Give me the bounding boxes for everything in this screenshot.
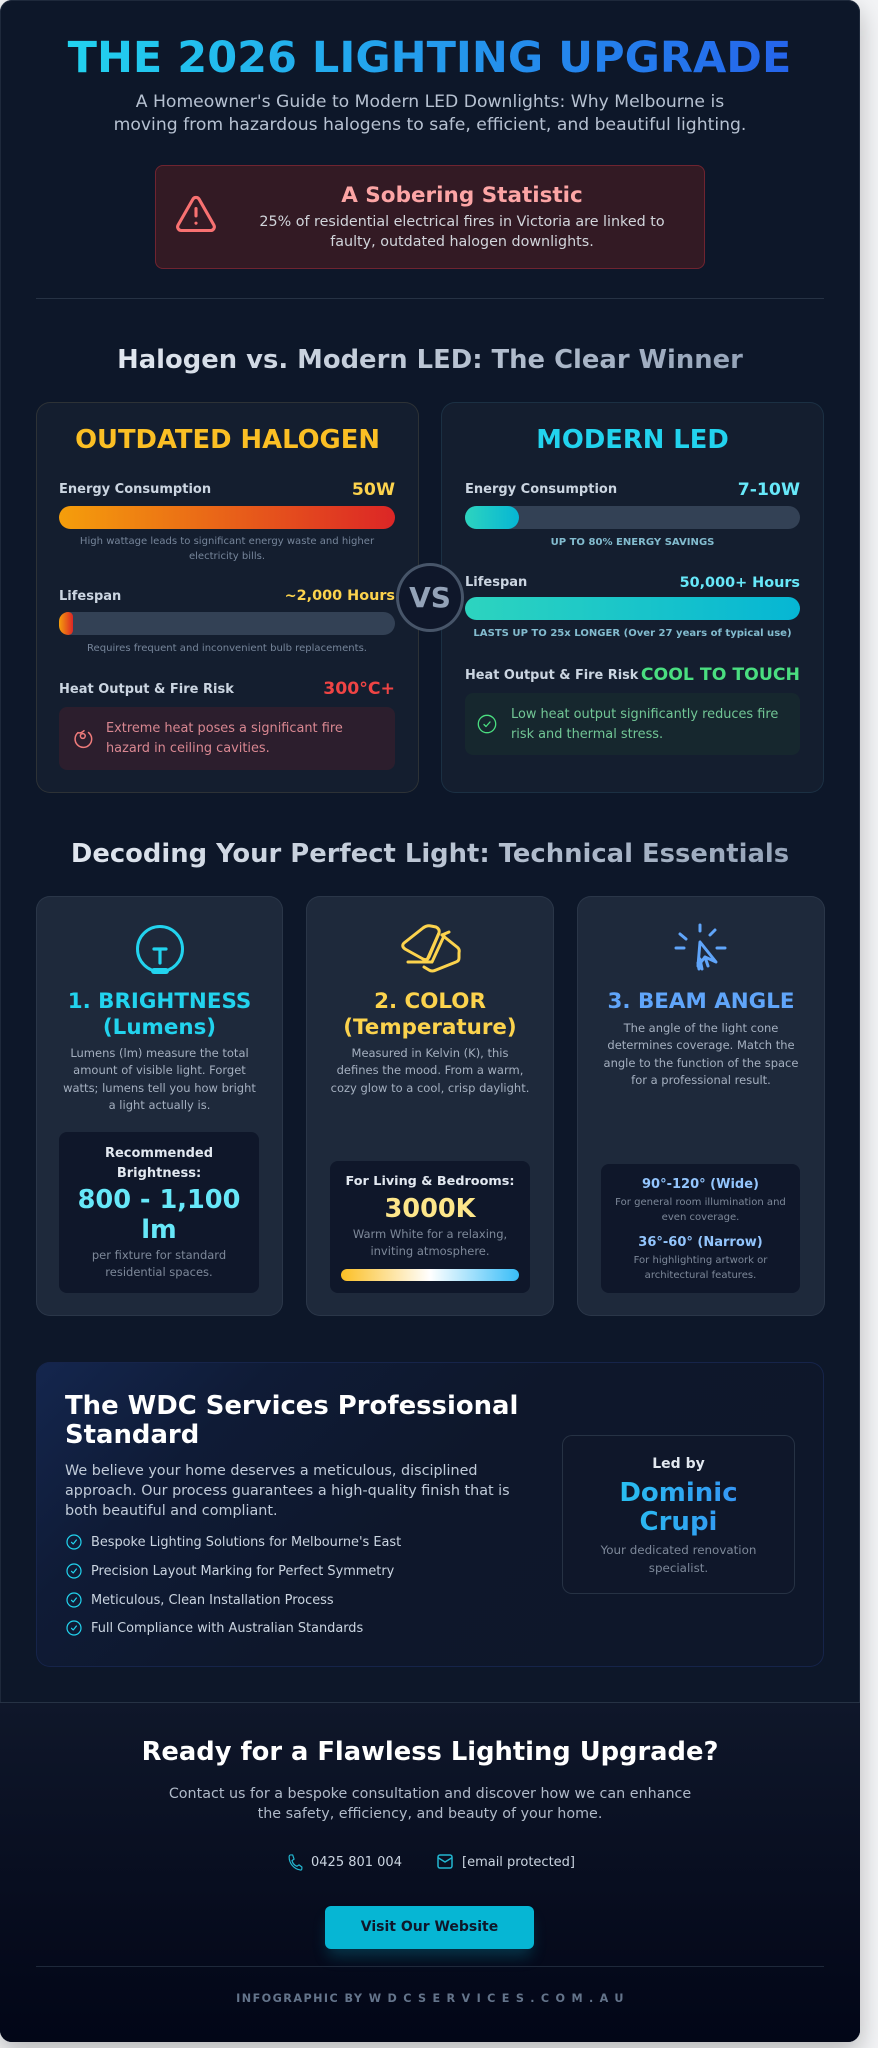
recommendation value — [78, 1185, 240, 1245]
energy label: Energy Consumption — [465, 482, 617, 497]
color title — [343, 989, 517, 1040]
panel: LED — [441, 402, 824, 793]
footer text: Contact us for a bespoke consultation and discover how we can enhance — [169, 1786, 691, 1802]
lifespan note: Requires frequent and inconvenient bulb replacements. — [87, 643, 367, 654]
color text — [331, 1046, 529, 1095]
beam text — [604, 1021, 798, 1087]
icon: color swatches — [401, 924, 461, 972]
checklist item — [66, 1534, 401, 1550]
heat value: COOL TO TOUCH — [641, 665, 800, 685]
heat label: Heat Output & Fire Risk — [59, 682, 234, 697]
divider — [36, 1966, 824, 1967]
brightness title: 1. BRIGHTNESS — [68, 989, 251, 1014]
color text: cozy glow to a cool, crisp daylight. — [331, 1081, 529, 1095]
section heading: technical: Decoding Your Perfect Light: Technical Essentials — [71, 839, 789, 869]
standard heading: Standard — [65, 1420, 199, 1450]
header divider — [36, 298, 824, 299]
icon: flame — [74, 730, 92, 748]
heat text: risk and thermal stress. — [511, 727, 663, 742]
beam text: for a professional result. — [631, 1073, 771, 1087]
color text: defines the mood. From a warm, — [337, 1063, 523, 1077]
lifespan label: Lifespan — [59, 589, 121, 604]
recommendation note — [353, 1227, 507, 1258]
narrow beam note — [634, 1255, 768, 1280]
item text: Precision Layout Marking for Perfect Symmetry — [91, 1564, 394, 1579]
beam text: determines coverage. Match the — [607, 1038, 795, 1052]
beam text: angle to the function of the space — [604, 1056, 798, 1070]
heat text: hazard in ceiling cavities. — [106, 741, 270, 756]
panel: beam angle — [577, 896, 825, 1316]
lifespan value: 50,000+ Hours — [680, 575, 800, 591]
narrow beam note: For highlighting artwork or — [634, 1255, 767, 1266]
icon: check circle — [478, 714, 496, 734]
item text: Bespoke Lighting Solutions for Melbourne's East — [91, 1535, 401, 1550]
footer text: the safety, efficiency, and beauty of your home. — [258, 1806, 602, 1822]
contact: email — [437, 1854, 575, 1870]
recommendation label: For Living & Bedrooms: — [346, 1174, 514, 1189]
icon: beam pointer — [674, 924, 726, 970]
checklist item — [66, 1563, 394, 1579]
subtitle: A Homeowner's Guide to Modern LED Downlights: Why Melbourne is — [136, 92, 724, 112]
recommendation value: 3000K — [384, 1194, 476, 1224]
brightness recommendation — [59, 1132, 259, 1293]
alert text: 25% of residential electrical fires in Victoria are linked to — [259, 214, 665, 230]
standard text: approach. Our process guarantees a high-quality finish that is — [65, 1483, 510, 1499]
VS badge: VS — [409, 581, 451, 614]
specialist note — [600, 1543, 756, 1575]
brightness text: watts; lumens tell you how bright — [63, 1081, 256, 1095]
phone number: 0425 801 004 — [311, 1855, 402, 1870]
energy bar — [465, 506, 800, 529]
color recommendation — [330, 1161, 530, 1293]
narrow beam note: architectural features. — [645, 1270, 756, 1280]
energy label: Energy Consumption — [59, 482, 211, 497]
wide beam note: For general room illumination and — [615, 1197, 786, 1208]
icon: check — [66, 1534, 82, 1550]
heat text: Low heat output significantly reduces fire — [511, 707, 778, 722]
panel: professional standard — [36, 1362, 824, 1667]
checklist item — [66, 1620, 363, 1636]
specialist note: specialist. — [649, 1561, 708, 1575]
specialist note: Your dedicated renovation — [601, 1543, 756, 1557]
wide beam note — [615, 1197, 786, 1222]
alert callout — [155, 165, 705, 269]
icon: phone — [288, 1854, 302, 1871]
heat callout — [59, 707, 395, 770]
icon: bulb — [136, 925, 184, 974]
energy value: 50W — [352, 480, 395, 500]
brightness text: amount of visible light. Forget — [73, 1063, 246, 1077]
recommendation note: inviting atmosphere. — [370, 1244, 490, 1258]
energy bar — [59, 506, 395, 529]
icon: check — [66, 1563, 82, 1579]
brightness text — [63, 1046, 256, 1112]
lifespan fill — [59, 612, 73, 635]
color title: 2. COLOR — [374, 989, 486, 1014]
color text: Measured in Kelvin (K), this — [352, 1046, 508, 1060]
icon: warning triangle — [176, 196, 216, 232]
energy note: UP TO 80% ENERGY SAVINGS — [551, 537, 714, 548]
recommendation note — [92, 1248, 226, 1279]
panel: brightness — [36, 896, 283, 1316]
item text: Meticulous, Clean Installation Process — [91, 1593, 334, 1608]
brightness title: (Lumens) — [103, 1015, 216, 1040]
brightness text: Lumens (lm) measure the total — [70, 1046, 249, 1060]
heat text — [511, 707, 778, 742]
recommendation label — [105, 1146, 213, 1181]
led by label: Led by — [652, 1456, 705, 1472]
button — [325, 1906, 534, 1949]
standard text — [65, 1463, 510, 1519]
lead specialist card — [562, 1435, 795, 1594]
subtitle: moving from hazardous halogens to safe, efficient, and beautiful lighting. — [114, 115, 746, 135]
footer text — [169, 1786, 691, 1822]
recommendation note: Warm White for a relaxing, — [353, 1227, 507, 1241]
wide beam note: even coverage. — [662, 1212, 739, 1222]
recommendation label: Recommended — [105, 1146, 213, 1161]
panel: halogen — [36, 402, 419, 793]
specialist name: Dominic — [619, 1478, 738, 1508]
icon: mail — [437, 1854, 453, 1869]
beam text: The angle of the light cone — [624, 1021, 778, 1035]
footer — [0, 1702, 860, 2042]
checklist — [66, 1534, 401, 1636]
VS badge — [396, 563, 464, 632]
energy value: 7-10W — [738, 480, 800, 500]
panel: color temperature — [306, 896, 554, 1316]
lifespan bar — [59, 612, 395, 635]
recommendation note: residential spaces. — [105, 1265, 213, 1279]
LED title: MODERN LED — [536, 425, 729, 455]
alert text — [259, 214, 665, 250]
alert text: faulty, outdated halogen downlights. — [330, 234, 594, 250]
subtitle — [114, 92, 746, 135]
color title: (Temperature) — [343, 1015, 517, 1040]
lifespan label: Lifespan — [465, 575, 527, 590]
item text: Full Compliance with Australian Standards — [91, 1621, 363, 1636]
energy note: High wattage leads to significant energy waste and higher — [80, 536, 374, 547]
narrow beam heading: 36°-60° (Narrow) — [638, 1235, 763, 1250]
energy note: electricity bills. — [189, 550, 265, 562]
footer heading: Ready for a Flawless Lighting Upgrade? — [142, 1737, 718, 1767]
lifespan note: LASTS UP TO 25x LONGER (Over 27 years of typical use) — [473, 628, 792, 639]
title: THE 2026 LIGHTING UPGRADE — [68, 33, 791, 83]
contact: phone — [288, 1854, 402, 1871]
email text: [email protected] — [462, 1855, 575, 1870]
heat callout — [465, 693, 800, 755]
heat value: 300°C+ — [323, 679, 395, 699]
specialist name: Crupi — [640, 1507, 717, 1537]
wide beam heading: 90°-120° (Wide) — [642, 1177, 759, 1192]
standard heading — [65, 1391, 518, 1450]
standard text: We believe your home deserves a meticulous, disciplined — [65, 1463, 478, 1479]
recommendation value: lm — [141, 1215, 177, 1245]
lifespan value: ~2,000 Hours — [285, 588, 395, 604]
checklist item — [66, 1592, 334, 1608]
heat text: Extreme heat poses a significant fire — [106, 721, 343, 736]
specialist name — [562, 1479, 795, 1537]
energy note — [80, 536, 374, 562]
icon: check — [66, 1620, 82, 1636]
temperature scale — [341, 1269, 519, 1281]
energy fill — [465, 506, 519, 529]
halogen title: OUTDATED HALOGEN — [75, 425, 380, 455]
brightness title — [68, 989, 251, 1040]
brightness text: a light actually is. — [109, 1098, 210, 1112]
standard heading: The WDC Services Professional — [65, 1391, 518, 1421]
header — [68, 33, 791, 269]
lifespan bar — [465, 597, 800, 620]
recommendation label: Brightness: — [117, 1166, 201, 1181]
heat label: Heat Output & Fire Risk — [465, 668, 638, 683]
recommendation value: 800 - 1,100 — [78, 1185, 240, 1215]
recommendation note: per fixture for standard — [92, 1248, 226, 1262]
heat text — [106, 721, 343, 756]
icon: check — [66, 1592, 82, 1608]
beam title: 3. BEAM ANGLE — [608, 989, 794, 1014]
button: Visit Our Website — [361, 1919, 498, 1935]
section heading: comparison: Halogen vs. Modern LED: The Clear Winner — [117, 345, 743, 375]
credit: INFOGRAPHIC BY WDCSERVICES.COM.AU — [236, 1992, 630, 2005]
standard text: both beautiful and compliant. — [65, 1503, 278, 1519]
beam specs — [601, 1164, 800, 1293]
alert heading: A Sobering Statistic — [341, 183, 583, 208]
